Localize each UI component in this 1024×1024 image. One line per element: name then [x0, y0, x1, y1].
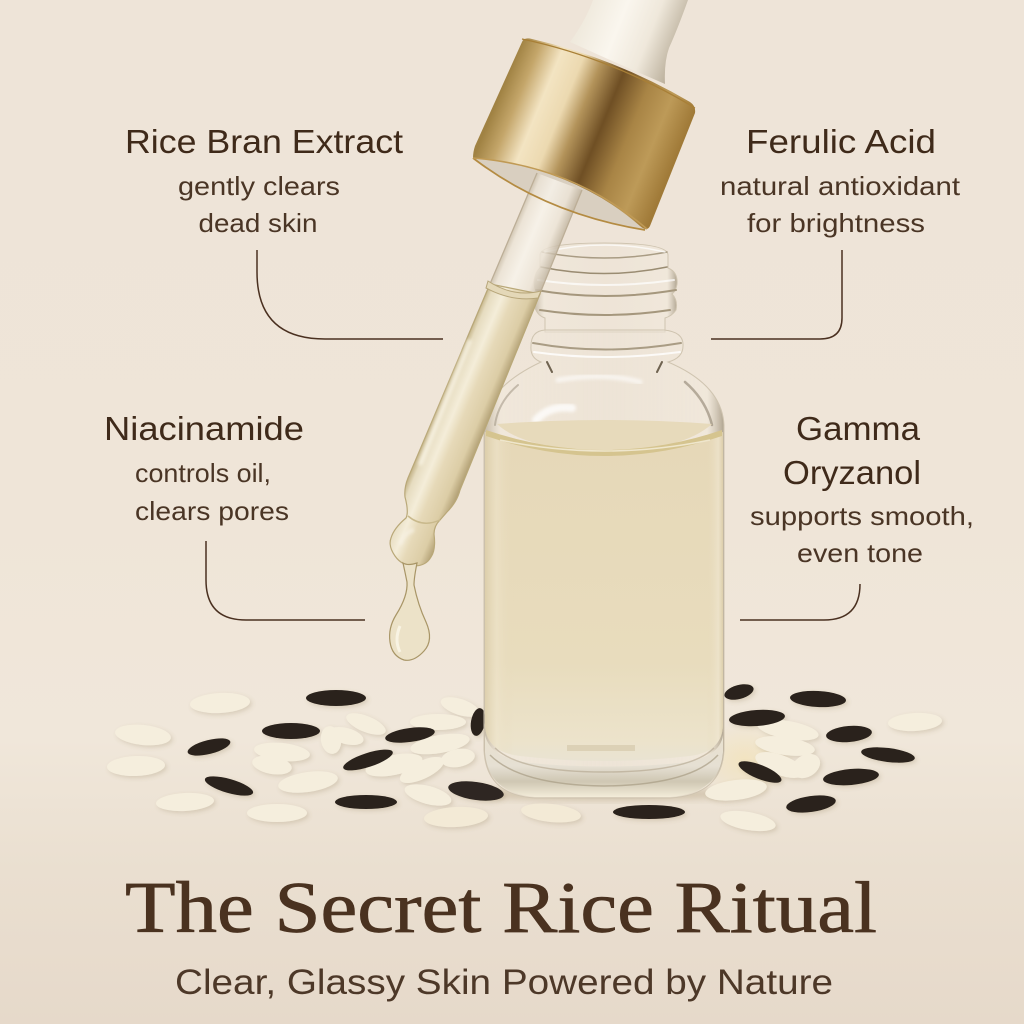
oil drop: [390, 563, 430, 660]
white rubber bulb: [570, 0, 688, 84]
pipette glass tube: [462, 173, 582, 350]
callout: ferulic acid: for brightness: [747, 208, 925, 238]
bottle neck and threads: [534, 243, 677, 332]
serum liquid: [485, 432, 723, 761]
callout: ferulic acid: natural antioxidant: [720, 171, 961, 201]
bottle shoulder and body: [484, 330, 724, 798]
pipette liquid: [390, 284, 540, 566]
callout: gamma oryzanol: [740, 410, 974, 620]
callout: niacinamide: [104, 410, 365, 620]
callout: gamma oryzanol: Gamma: [796, 410, 921, 447]
rice grains in front of the bottle: [424, 776, 777, 835]
callout: gamma oryzanol: Oryzanol: [783, 454, 921, 491]
callout: rice bran extract: [125, 123, 443, 339]
title: The Secret Rice Ritual: [125, 867, 877, 948]
callout: ferulic acid: Ferulic Acid: [746, 123, 936, 160]
callout: gamma oryzanol: even tone: [797, 538, 923, 568]
rice grains behind the bottle: [107, 681, 942, 822]
callout: niacinamide: Niacinamide: [104, 410, 304, 447]
callout: ferulic acid: [711, 123, 961, 339]
subtitle: Clear, Glassy Skin Powered by Nature: [175, 963, 833, 1002]
callout: rice bran extract: dead skin: [198, 208, 318, 238]
callout: gamma oryzanol: supports smooth,: [750, 501, 974, 531]
callout: niacinamide: controls oil,: [135, 458, 271, 488]
bottle base: [485, 735, 723, 797]
callout: rice bran extract: Rice Bran Extract: [125, 123, 403, 160]
serum bottle: [476, 243, 732, 800]
cap opening: [473, 158, 647, 230]
dropper pipette: [390, 0, 695, 660]
callout: rice bran extract: gently clears: [178, 171, 340, 201]
callout: niacinamide: clears pores: [135, 496, 289, 526]
warm light glow on the table: [695, 722, 795, 798]
gold collar: [473, 38, 695, 229]
